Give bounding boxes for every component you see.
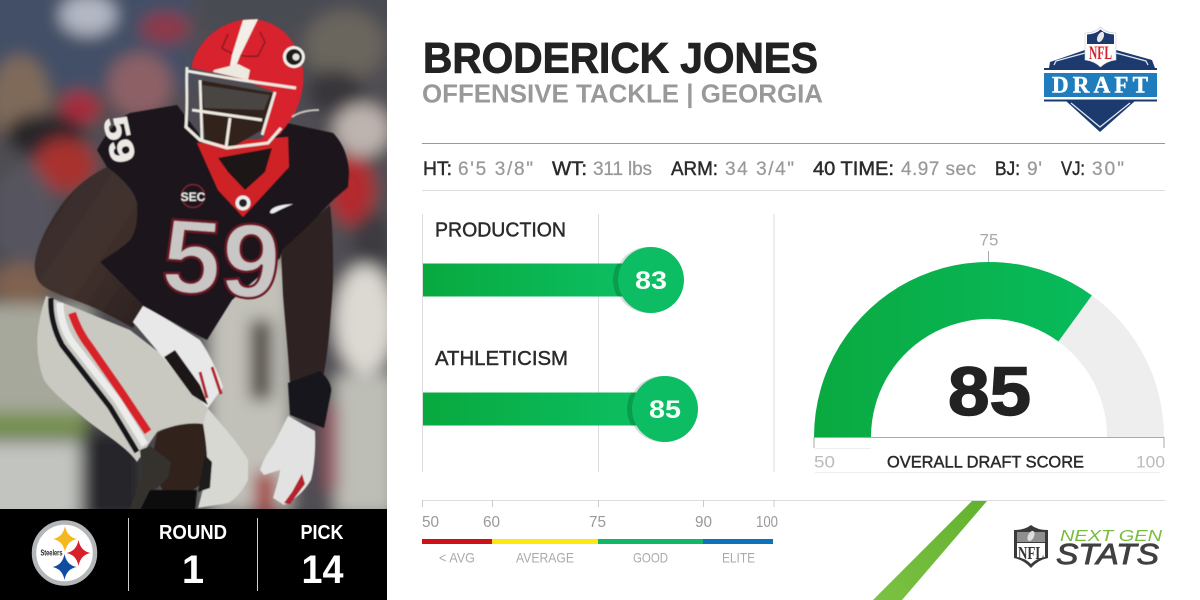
blurred stadium background	[0, 0, 410, 530]
grade scale legend: GOOD	[633, 550, 668, 566]
icon: NFL Draft logo: DRAFT	[1052, 72, 1148, 98]
pant stripes	[51, 298, 137, 452]
measurables row: HT:	[423, 159, 452, 180]
measurables row: ARM:	[671, 159, 718, 180]
swoosh	[270, 204, 293, 213]
grade scale legend: AVERAGE	[516, 550, 574, 566]
helmet logo	[283, 46, 305, 68]
gauge remainder	[1058, 295, 1164, 437]
grade scale legend	[422, 500, 778, 566]
player figure	[35, 19, 349, 510]
production bar: PRODUCTION	[435, 220, 566, 242]
jersey	[97, 105, 349, 340]
athleticism bar: ATHLETICISM	[435, 348, 568, 370]
rear right arm	[281, 205, 333, 382]
sleeve number: 59	[95, 113, 142, 167]
measurables row: WT:	[552, 159, 587, 180]
right glove	[260, 416, 315, 505]
position and college: OFFENSIVE TACKLE | GEORGIA	[422, 78, 823, 108]
knee brace	[130, 446, 171, 509]
measurables row: 6'5 3/8"	[458, 159, 533, 180]
SEC patch	[181, 184, 206, 208]
grade scale legend: 75	[589, 514, 606, 531]
helmet decal	[222, 32, 265, 56]
pick: 14	[302, 548, 344, 592]
measurables row: 40 TIME:	[813, 159, 894, 180]
grade scale legend: ELITE	[722, 550, 755, 566]
pick: PICK	[300, 522, 344, 544]
right thigh	[198, 405, 248, 508]
collar G logo	[236, 196, 250, 210]
grade scale legend: 50	[422, 514, 439, 531]
overall draft score gauge: 100	[1136, 452, 1165, 472]
SEC patch: SEC	[181, 190, 206, 204]
player name: BRODERICK JONES	[423, 34, 818, 82]
production bar	[423, 220, 684, 313]
75 tick label: 75	[980, 230, 998, 250]
measurables row: VJ:	[1061, 159, 1085, 180]
icon: Next Gen Stats logo	[1014, 525, 1163, 571]
score value: 85	[948, 353, 1031, 430]
player photo	[0, 0, 410, 530]
round	[159, 522, 227, 592]
left glove	[133, 306, 223, 408]
overall draft score gauge: OVERALL DRAFT SCORE	[887, 452, 1084, 472]
production bar: 83	[635, 267, 667, 295]
measurables row: 9'	[1027, 159, 1042, 180]
overall draft score gauge	[814, 230, 1165, 472]
facemask	[186, 67, 296, 148]
round: 1	[182, 548, 204, 592]
athleticism bar: 85	[649, 396, 681, 424]
icon: NFL Draft logo	[1044, 27, 1157, 132]
icon: Next Gen Stats logo: STATS	[1056, 539, 1160, 571]
helmet shell	[192, 19, 303, 142]
knee and lower leg	[150, 423, 207, 492]
left arm	[35, 167, 145, 328]
wrist brace	[288, 371, 331, 428]
icon: Steelers logo	[34, 522, 95, 584]
measurables row: 4.97 sec	[901, 159, 976, 180]
pants	[37, 296, 208, 462]
gauge fill	[814, 262, 1092, 437]
helmet stripe	[230, 19, 258, 66]
collar	[197, 137, 289, 217]
grade scale legend: 100	[756, 514, 778, 531]
grade scale legend: 90	[695, 514, 712, 531]
measurables row	[423, 159, 1124, 180]
icon: Steelers logo: Steelers	[40, 548, 63, 558]
grade scale legend: < AVG	[439, 550, 475, 566]
jersey number: 59	[158, 197, 284, 322]
team and draft position bar	[0, 509, 387, 600]
ear tab	[292, 110, 319, 117]
pick	[300, 522, 344, 592]
NFL shield: NFL	[1089, 43, 1112, 64]
measurables row: 34 3/4"	[725, 159, 794, 180]
athleticism bar	[423, 348, 698, 442]
icon: Next Gen Stats logo: NEXT GEN	[1060, 528, 1163, 545]
measurables row: 311 lbs	[593, 159, 652, 180]
grade scale legend: 60	[483, 514, 500, 531]
NFL shield mark	[1014, 525, 1048, 568]
NFL shield mark: NFL	[1018, 543, 1044, 563]
round: ROUND	[159, 522, 227, 544]
measurables row: 30"	[1092, 159, 1124, 180]
face	[199, 80, 273, 147]
gauge labels: 50	[814, 452, 835, 472]
measurables row: BJ:	[995, 159, 1020, 180]
green slash accent	[873, 501, 987, 600]
